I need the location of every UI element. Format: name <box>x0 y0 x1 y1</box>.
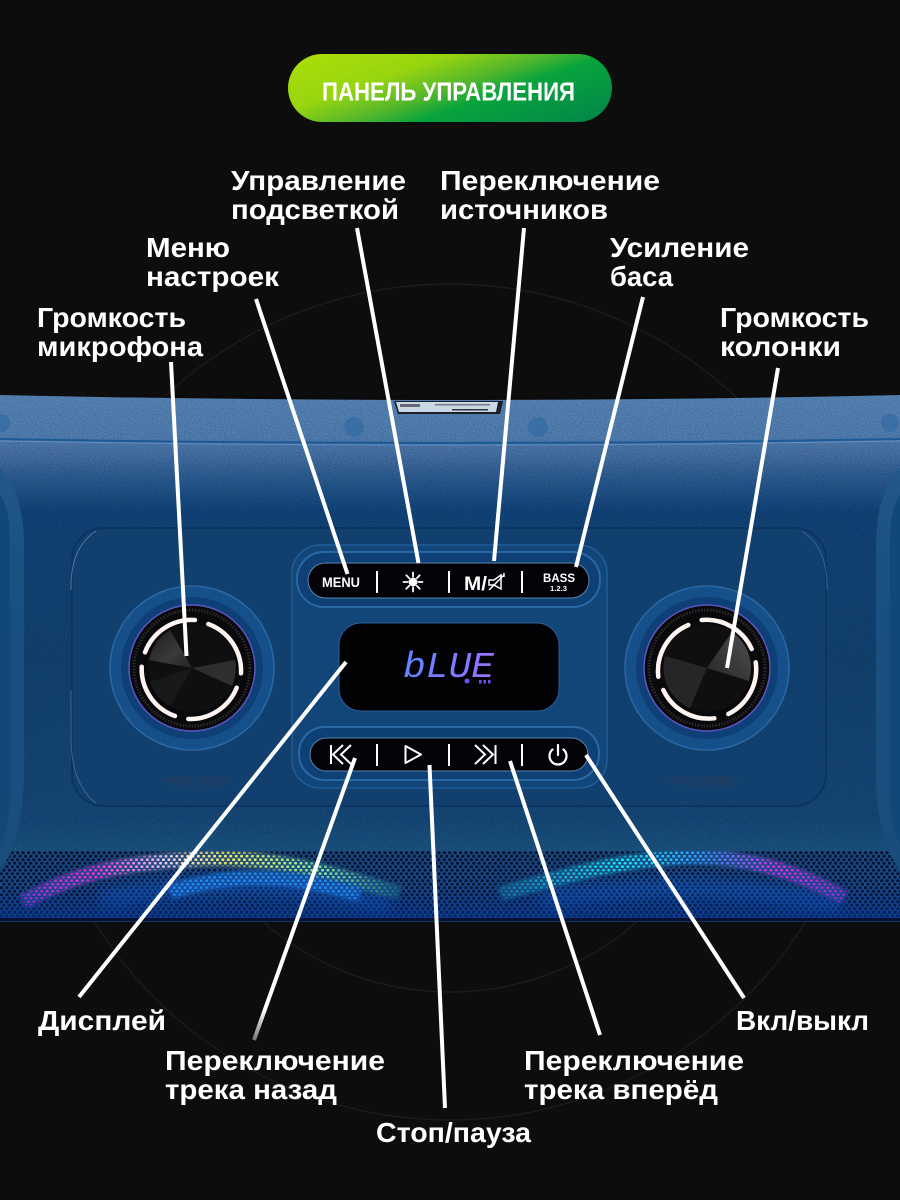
left knob: mic volume <box>110 586 274 750</box>
label: stop pause: Стоп/пауза <box>376 1117 531 1148</box>
line: mic volume <box>171 362 186 656</box>
screw bumps <box>0 414 899 437</box>
divider bars <box>376 571 523 593</box>
line: power <box>586 755 744 998</box>
speaker volume caption: −VOLUME+ <box>666 773 739 788</box>
center button housing <box>292 545 607 788</box>
line: display <box>79 662 346 997</box>
title pill <box>288 54 612 122</box>
bottom colour fade <box>0 866 900 918</box>
line: bass <box>576 297 643 567</box>
knob brushed sectors <box>663 632 751 708</box>
MENU button: MENU <box>322 575 360 590</box>
control panel recess <box>71 528 827 806</box>
label: bass boost: баса <box>610 261 673 292</box>
label: source switching: Переключение <box>440 165 660 196</box>
label: next track: трека вперёд <box>524 1074 718 1105</box>
light ring <box>658 620 756 719</box>
right side bumper <box>876 467 900 868</box>
label: settings menu: настроек <box>146 261 280 292</box>
label: source switching: источников <box>440 194 608 225</box>
label: mic volume: Громкость <box>37 302 186 333</box>
left side bumper <box>0 467 24 868</box>
mic volume caption: −MIC.VOL+ <box>160 773 232 788</box>
line: next track <box>510 761 600 1035</box>
title pill: ПАНЕЛЬ УПРАВЛЕНИЯ <box>322 76 575 106</box>
bass levels: 1.2.3 <box>550 584 567 593</box>
label: backlight control: подсветкой <box>231 194 399 225</box>
sticker <box>394 401 503 414</box>
icon: source speaker <box>489 573 504 590</box>
icon: next track <box>475 745 496 764</box>
label: power: Вкл/выкл <box>736 1005 869 1036</box>
icon: previous track <box>331 745 351 764</box>
line: play pause <box>430 765 445 1108</box>
left light arc <box>23 858 400 902</box>
label: settings menu: Меню <box>146 232 230 263</box>
right light arc <box>500 857 845 898</box>
line: speaker volume <box>727 368 778 668</box>
divider bars <box>376 744 523 766</box>
line: backlight <box>357 228 418 563</box>
decorative inner circle <box>166 424 734 992</box>
callout lines <box>79 228 778 1108</box>
line: settings menu <box>256 299 348 574</box>
label: backlight control: Управление <box>231 165 406 196</box>
display indicators <box>464 678 490 684</box>
source button M/: M/ <box>464 574 488 595</box>
soft blue glow <box>100 886 840 905</box>
line: previous track <box>254 758 355 1040</box>
display <box>339 623 559 711</box>
label: bass boost: Усиление <box>610 232 749 263</box>
speaker body <box>0 395 900 922</box>
right knob: speaker volume <box>625 586 789 750</box>
decorative outer circle <box>32 284 868 1120</box>
icon: power <box>550 745 567 764</box>
light ring <box>142 620 241 719</box>
top button strip <box>308 563 589 598</box>
display text: bLUE <box>403 647 494 688</box>
label: mic volume: микрофона <box>37 331 203 362</box>
label: display: Дисплей <box>38 1005 166 1036</box>
speaker grille with RGB light <box>0 850 900 922</box>
BASS button: BASS <box>543 571 575 585</box>
icon: brightness sun <box>404 572 422 592</box>
label: speaker volume: колонки <box>720 331 841 362</box>
label: speaker volume: Громкость <box>720 302 869 333</box>
label: next track: Переключение <box>524 1045 744 1076</box>
knob brushed sectors <box>149 630 236 706</box>
label: previous track: трека назад <box>165 1074 337 1105</box>
label: previous track: Переключение <box>165 1045 385 1076</box>
line: sources <box>494 228 524 561</box>
bottom button strip <box>310 738 588 771</box>
icon: play <box>406 746 421 763</box>
